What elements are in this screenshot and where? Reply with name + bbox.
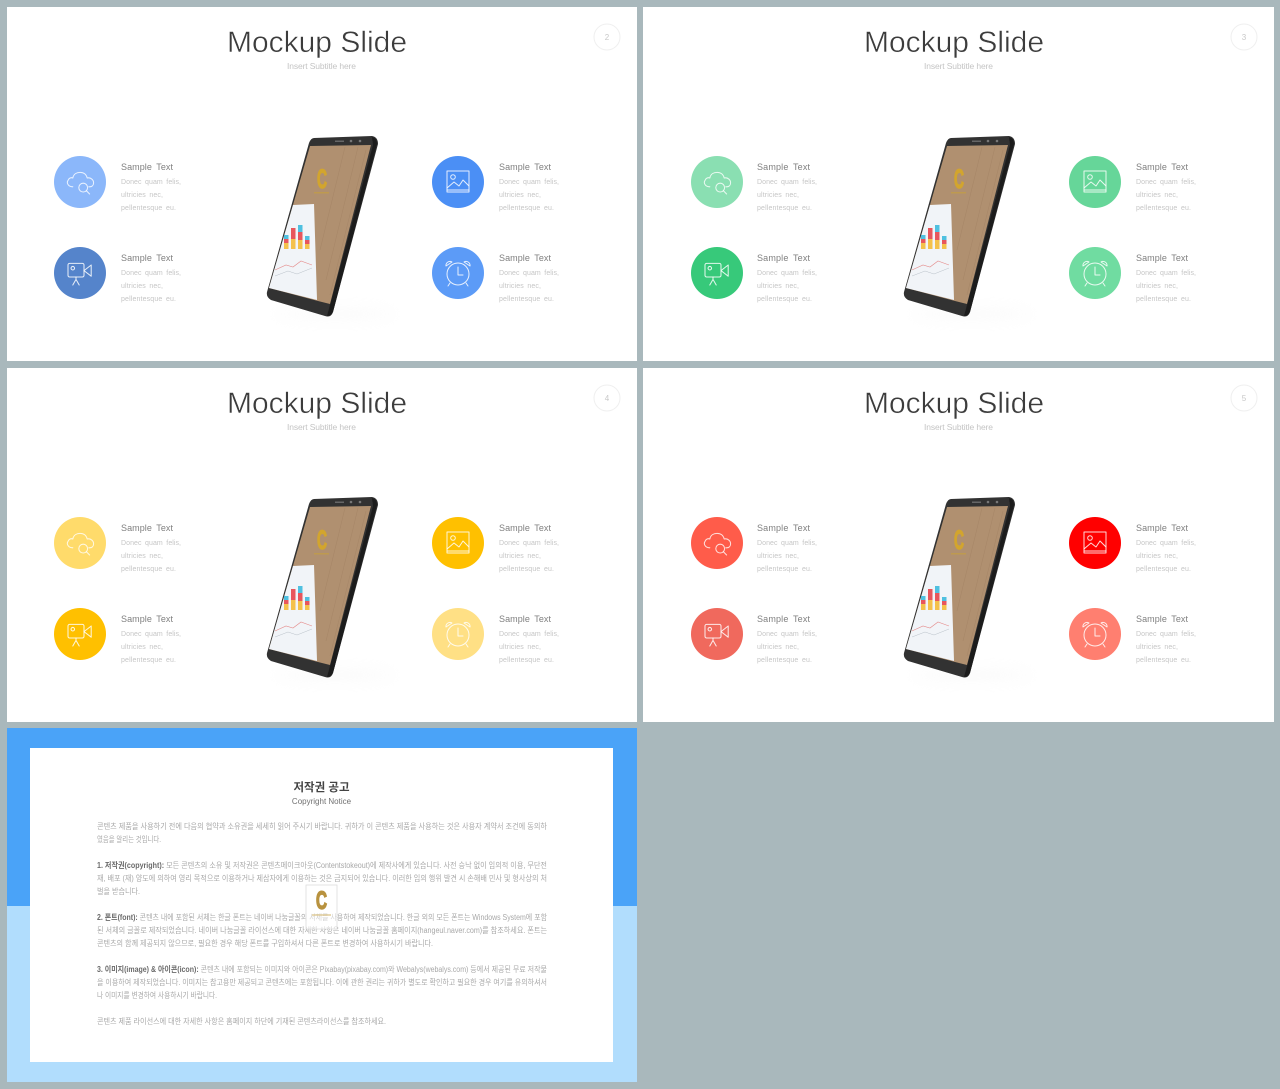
text block: bottom left: pellentesque eu. bbox=[757, 296, 812, 303]
text block: clause 3 image and icon: 을 이용하여 제작되었습니다. 이미지는 참고용만 제공되고 콘텐츠에는 포함됩니다. 이에 관한 권리는 귀하가 별도로 확인하고 필요한 경우 여기를 유의하셔서 bbox=[97, 977, 547, 987]
icon: alarm clock bbox=[432, 247, 484, 299]
text block: top left: Donec quam felis, bbox=[757, 540, 817, 547]
text block: intro: 콘텐츠 제품을 사용하기 전에 다음의 협약과 소유권을 세세히 읽어 주시기 바랍니다. 귀하가 이 콘텐츠 제품을 사용하는 것은 사용자 계약서 조건에 동의하 bbox=[97, 821, 548, 831]
text block: top left: Donec quam felis, bbox=[757, 179, 817, 186]
text block: top right: pellentesque eu. bbox=[499, 205, 554, 212]
text block: clause 3 image and icon bbox=[97, 964, 547, 1000]
text block: top left: ultricies nec, bbox=[121, 192, 163, 199]
subtitle: Insert Subtitle here bbox=[924, 61, 993, 71]
icon: video camera bbox=[691, 247, 743, 299]
text block: bottom right bbox=[1136, 614, 1196, 664]
text block: bottom right: Donec quam felis, bbox=[499, 631, 559, 638]
text block: top right: ultricies nec, bbox=[1136, 553, 1178, 560]
panel: blue mockup slide bbox=[7, 7, 637, 361]
text block: top left: ultricies nec, bbox=[757, 192, 799, 199]
text block: bottom right: pellentesque eu. bbox=[1136, 296, 1191, 303]
text block: bottom left: pellentesque eu. bbox=[121, 296, 176, 303]
title: Mockup Slide bbox=[864, 26, 1044, 59]
text block: top right: ultricies nec, bbox=[1136, 192, 1178, 199]
logo badge: C bbox=[316, 887, 327, 915]
text block: bottom left: pellentesque eu. bbox=[121, 657, 176, 664]
text block: clause 1 copyright: 벌을 받습니다. bbox=[97, 886, 140, 896]
text block: bottom right: Sample Text bbox=[1136, 614, 1188, 624]
icon: alarm clock bbox=[432, 608, 484, 660]
subheading: Copyright Notice bbox=[292, 797, 352, 806]
text block: bottom right: ultricies nec, bbox=[1136, 644, 1178, 651]
icon: picture bbox=[432, 517, 484, 569]
logo badge bbox=[306, 885, 337, 929]
text block: clause 2 font bbox=[97, 912, 548, 948]
text block: top right: Donec quam felis, bbox=[499, 540, 559, 547]
text block: top right: ultricies nec, bbox=[499, 192, 541, 199]
text block: bottom right: pellentesque eu. bbox=[499, 657, 554, 664]
text block: top left: Sample Text bbox=[121, 162, 173, 172]
panel: red mockup slide bbox=[643, 368, 1274, 722]
phone mockup: C bbox=[954, 525, 964, 555]
panel: green mockup slide bbox=[643, 7, 1274, 361]
text block: intro: 였음을 알리는 것입니다. bbox=[97, 834, 161, 844]
text block: top right: pellentesque eu. bbox=[499, 566, 554, 573]
text block: top left: pellentesque eu. bbox=[757, 566, 812, 573]
icon: cloud search bbox=[54, 517, 106, 569]
text block: bottom left: Donec quam felis, bbox=[757, 270, 817, 277]
text block: bottom left: pellentesque eu. bbox=[757, 657, 812, 664]
text block: bottom right: ultricies nec, bbox=[1136, 283, 1178, 290]
icon: video camera bbox=[54, 608, 106, 660]
text block: clause 1 copyright: 1. 저작권(copyright): 모든 콘텐츠의 소유 및 저작권은 콘텐츠메이크아웃(Contentstokeout)에 제작사에게 있습니다. 사전 승낙 없이 임의적 이용, 무단전 bbox=[97, 860, 547, 870]
text block: bottom left: Sample Text bbox=[121, 614, 173, 624]
text block: clause 3 image and icon: 3. 이미지(image) & 아이콘(icon): 콘텐츠 내에 포함되는 이미지와 아이콘은 Pixabay(pixabay.com)와 Webalys(webalys.com) 등에서 제공된 무료 저작물 bbox=[97, 964, 547, 974]
text block: bottom left bbox=[121, 253, 181, 303]
text block: top right: pellentesque eu. bbox=[1136, 205, 1191, 212]
page number badge: 3 bbox=[1242, 33, 1247, 42]
icon: picture bbox=[1069, 517, 1121, 569]
text block: top right: Sample Text bbox=[499, 523, 551, 533]
icon: cloud search bbox=[691, 156, 743, 208]
phone mockup: C bbox=[317, 164, 327, 194]
text block: top right: pellentesque eu. bbox=[1136, 566, 1191, 573]
text block: clause 1 copyright: 재, 배포 (재) 양도에 의하여 영리 목적으로 이용하거나 제삼자에게 이용하는 것은 금지되어 있습니다. 이러한 임의 행위 발견 시 손해배 민사 및 형사상의 처 bbox=[97, 873, 547, 883]
phone mockup: C bbox=[954, 164, 964, 194]
text block: bottom right: Sample Text bbox=[1136, 253, 1188, 263]
page number badge bbox=[594, 385, 620, 411]
phone mockup bbox=[904, 136, 1032, 320]
text block: bottom left bbox=[757, 614, 817, 664]
text block: bottom left: Donec quam felis, bbox=[121, 631, 181, 638]
text block: bottom left: Sample Text bbox=[757, 253, 810, 263]
text block: top left: pellentesque eu. bbox=[121, 566, 176, 573]
text block: bottom right: ultricies nec, bbox=[499, 644, 541, 651]
text block: bottom right bbox=[499, 253, 559, 303]
text block: bottom right: Sample Text bbox=[499, 614, 551, 624]
text block: top right: Donec quam felis, bbox=[1136, 540, 1196, 547]
text block: bottom left: Donec quam felis, bbox=[757, 631, 817, 638]
text block: top left: Sample Text bbox=[121, 523, 173, 533]
text block: bottom left: ultricies nec, bbox=[121, 283, 163, 290]
text block: bottom right bbox=[1136, 253, 1196, 303]
text block: top left: ultricies nec, bbox=[757, 553, 799, 560]
text block: top left bbox=[121, 162, 181, 212]
text block: top left bbox=[757, 162, 817, 212]
text block: top left: pellentesque eu. bbox=[121, 205, 176, 212]
page number badge: 2 bbox=[605, 33, 610, 42]
text block: top right: Sample Text bbox=[1136, 523, 1188, 533]
panel: copyright notice bbox=[7, 728, 637, 1082]
text block: bottom right: Sample Text bbox=[499, 253, 551, 263]
text block: bottom left bbox=[757, 253, 817, 303]
page number badge: 4 bbox=[605, 394, 610, 403]
text block: bottom right: Donec quam felis, bbox=[499, 270, 559, 277]
text block: bottom left: ultricies nec, bbox=[757, 283, 799, 290]
page number badge bbox=[1231, 385, 1257, 411]
text block: bottom right: pellentesque eu. bbox=[1136, 657, 1191, 664]
page number badge bbox=[1231, 24, 1257, 50]
icon: video camera bbox=[54, 247, 106, 299]
text block: bottom left: Sample Text bbox=[121, 253, 173, 263]
text block: top right bbox=[1136, 523, 1196, 573]
text block: top right: ultricies nec, bbox=[499, 553, 541, 560]
title: Mockup Slide bbox=[227, 26, 407, 59]
text block: top right: Sample Text bbox=[1136, 162, 1188, 172]
title: Mockup Slide bbox=[227, 387, 407, 420]
text block: intro bbox=[97, 821, 548, 844]
text block: top right bbox=[1136, 162, 1196, 212]
icon: video camera bbox=[691, 608, 743, 660]
text block: top left: Sample Text bbox=[757, 523, 810, 533]
text block: clause 3 image and icon: 나 이미지를 변경하여 사용하시기 바랍니다. bbox=[97, 990, 217, 1000]
text block: bottom right: ultricies nec, bbox=[499, 283, 541, 290]
subtitle: Insert Subtitle here bbox=[287, 422, 356, 432]
text block: top right bbox=[499, 162, 559, 212]
text block: top left: pellentesque eu. bbox=[757, 205, 812, 212]
text block: license note: 콘텐츠 제품 라이선스에 대한 자세한 사항은 홈페이지 하단에 기재된 콘텐츠라이선스를 참조하세요. bbox=[97, 1016, 386, 1026]
text block: bottom left: Donec quam felis, bbox=[121, 270, 181, 277]
text block: top right bbox=[499, 523, 559, 573]
page number badge: 5 bbox=[1242, 394, 1247, 403]
text block: bottom left: Sample Text bbox=[757, 614, 810, 624]
title: Mockup Slide bbox=[864, 387, 1044, 420]
text block: bottom left: ultricies nec, bbox=[757, 644, 799, 651]
panel: yellow mockup slide bbox=[7, 368, 637, 722]
text block: clause 1 copyright bbox=[97, 860, 547, 896]
text block: clause 2 font: 콘텐츠의 함께 제공되지 않으므로, 필요한 경우 해당 폰트를 구입하셔서 다른 폰트로 변경하여 사용하시기 바랍니다. bbox=[97, 938, 433, 948]
phone mockup: C bbox=[317, 525, 327, 555]
phone mockup bbox=[267, 497, 395, 681]
text block: top left: Donec quam felis, bbox=[121, 540, 181, 547]
page number badge bbox=[594, 24, 620, 50]
text block: top left bbox=[121, 523, 181, 573]
text block: bottom right: Donec quam felis, bbox=[1136, 270, 1196, 277]
text block: top left: Sample Text bbox=[757, 162, 810, 172]
icon: alarm clock bbox=[1069, 247, 1121, 299]
text block: top left: ultricies nec, bbox=[121, 553, 163, 560]
text block: top right: Sample Text bbox=[499, 162, 551, 172]
text block: bottom left bbox=[121, 614, 181, 664]
text block: bottom right: Donec quam felis, bbox=[1136, 631, 1196, 638]
subtitle: Insert Subtitle here bbox=[924, 422, 993, 432]
icon: alarm clock bbox=[1069, 608, 1121, 660]
text block: top right: Donec quam felis, bbox=[499, 179, 559, 186]
heading: copyright notice: 저작권 공고 bbox=[293, 780, 350, 794]
icon: cloud search bbox=[691, 517, 743, 569]
text block: top right: Donec quam felis, bbox=[1136, 179, 1196, 186]
icon: picture bbox=[1069, 156, 1121, 208]
subtitle: Insert Subtitle here bbox=[287, 61, 356, 71]
text block: top left bbox=[757, 523, 817, 573]
icon: picture bbox=[432, 156, 484, 208]
text block: bottom right bbox=[499, 614, 559, 664]
text block: clause 2 font: 2. 폰트(font): 콘텐츠 내에 포함된 서체는 한글 폰트는 네이버 나눔글꼴의 서체를 사용하여 제작되었습니다. 한글 외의 모든 폰트는 Windows System에 포함 bbox=[97, 912, 548, 922]
icon: cloud search bbox=[54, 156, 106, 208]
text block: top left: Donec quam felis, bbox=[121, 179, 181, 186]
text block: bottom left: ultricies nec, bbox=[121, 644, 163, 651]
text block: clause 2 font: 된 서체의 글꼴로 제작되었습니다. 네이버 나눔글꼴 라이선스에 대한 자세한 사항은 네이버 나눔글꼴 홈페이지(hangeul.naver.com)를 참조하세요. 폰트는 bbox=[97, 925, 547, 935]
phone mockup bbox=[267, 136, 395, 320]
text block: bottom right: pellentesque eu. bbox=[499, 296, 554, 303]
phone mockup bbox=[904, 497, 1032, 681]
